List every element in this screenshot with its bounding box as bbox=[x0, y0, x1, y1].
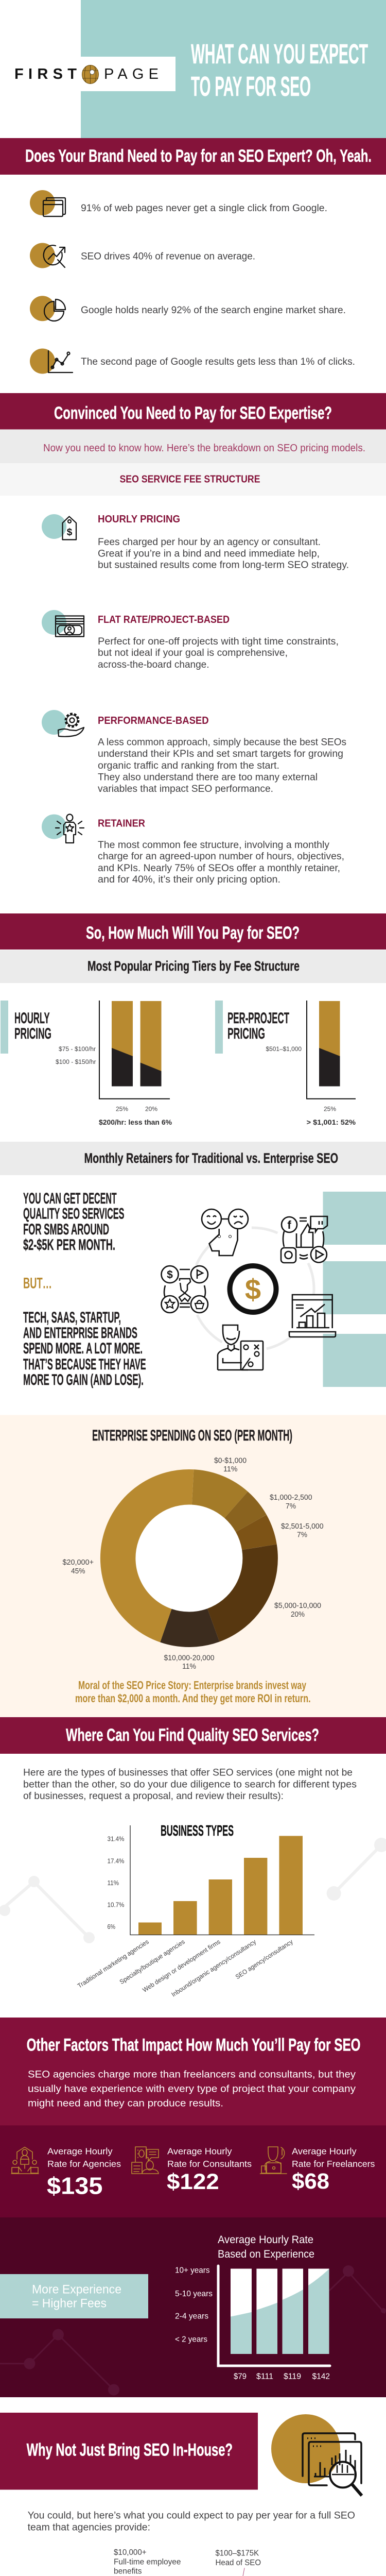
callout: more experience bbox=[0, 2274, 148, 2318]
chart: hourly pricing: $100 - $150/hr bbox=[56, 1059, 96, 1065]
text block: retainer copy: AND ENTERPRISE BRANDS bbox=[23, 1325, 137, 1342]
fee model: flat rate: FLAT RATE/PROJECT-BASED bbox=[98, 614, 230, 625]
icon: consultant bbox=[132, 2147, 159, 2174]
subheading band: fee structure: SEO SERVICE FEE STRUCTURE bbox=[119, 474, 260, 485]
title bbox=[191, 39, 368, 102]
icon: hand holding gear bbox=[42, 710, 84, 737]
body text: understand their KPIs and set smart targets for growing bbox=[98, 749, 343, 759]
icon: marketing funnel bbox=[162, 1266, 208, 1313]
chart: per-project pricing bbox=[215, 1001, 356, 1126]
chart: hourly rate by experience: $79 bbox=[234, 2372, 247, 2381]
donut labels: $10,000-20,000 bbox=[164, 1654, 214, 1662]
logo bbox=[14, 65, 159, 83]
callout: more experience: More Experience bbox=[32, 2283, 121, 2297]
stat: 40 percent bbox=[30, 243, 255, 268]
icon: star person bbox=[42, 814, 84, 843]
bar chart: business types: Traditional marketing agencies bbox=[76, 1938, 150, 1990]
icon: money bill bbox=[42, 610, 84, 637]
stat: 91 percent bbox=[30, 190, 327, 216]
donut labels bbox=[63, 1457, 323, 1671]
section heading: does your brand need SEO bbox=[0, 138, 386, 175]
bar chart: business types: Web design or development firms bbox=[142, 1938, 222, 1994]
text block: in-house intro: You could, but here’s what you could expect to pay per year for a full SEO bbox=[28, 2511, 355, 2521]
fee model: retainer bbox=[42, 814, 344, 885]
stat: second page: The second page of Google results gets less than 1% of clicks. bbox=[81, 357, 355, 367]
text block: retainer copy: THAT’S BECAUSE THEY HAVE bbox=[23, 1356, 146, 1373]
text block: usually have experience with every type of project that your company bbox=[28, 2083, 356, 2095]
label: head of SEO: Head of SEO bbox=[215, 2558, 261, 2567]
section heading: how much will you pay: So, How Much Will You Pay for SEO? bbox=[86, 923, 300, 943]
body text bbox=[98, 840, 344, 885]
teal side blocks bbox=[323, 1192, 386, 1387]
chart: hourly pricing: $75 - $100/hr bbox=[59, 1046, 96, 1053]
donut chart bbox=[89, 1458, 290, 1659]
stat: 92 percent bbox=[30, 296, 346, 321]
logo: FIRST bbox=[14, 66, 77, 82]
subheading band: monthly retainers bbox=[0, 1142, 386, 1175]
rate: consultants: Average Hourly bbox=[167, 2146, 232, 2157]
rate: agencies bbox=[11, 2146, 121, 2199]
fee model: retainer: RETAINER bbox=[98, 818, 146, 829]
stat: 92 percent: Google holds nearly 92% of the search engine market share. bbox=[81, 305, 346, 316]
text block bbox=[28, 2069, 356, 2109]
label: benefits: benefits bbox=[114, 2567, 142, 2576]
fee model: hourly pricing bbox=[42, 514, 349, 571]
bar chart: business types: 31.4% bbox=[107, 1835, 125, 1843]
rate: consultants bbox=[132, 2146, 252, 2194]
rate: freelancers: $68 bbox=[292, 2169, 329, 2194]
section heading: convinced bbox=[0, 393, 386, 430]
body text: Great if you’re in a bind and need immediate help, bbox=[98, 548, 320, 560]
donut labels: $20,000+ bbox=[63, 1558, 94, 1567]
donut chart: in-house cost bbox=[26, 2548, 358, 2576]
icon: faces and head bbox=[202, 1209, 248, 1256]
body text: A less common approach, simply because the best SEOs bbox=[98, 737, 346, 748]
rate: consultants: $122 bbox=[167, 2170, 219, 2194]
stat list bbox=[30, 190, 355, 374]
chart: hourly rate by experience: $142 bbox=[312, 2372, 330, 2381]
icon: price tag: $ bbox=[67, 527, 73, 538]
text block: business intro: Here are the types of businesses that offer SEO services (one might not be bbox=[23, 1768, 353, 1778]
text block: in-house intro bbox=[28, 2511, 355, 2533]
chart: hourly rate by experience bbox=[175, 2234, 330, 2381]
bar chart: business types: 11% bbox=[107, 1879, 119, 1887]
icon: freelancer bbox=[260, 2147, 287, 2174]
bar chart: business types: 17.4% bbox=[107, 1857, 125, 1865]
icon: marketing funnel: $ bbox=[167, 1269, 173, 1281]
body text: Perfect for one-off projects with tight time constraints, bbox=[98, 636, 339, 647]
chart: hourly pricing: 25% bbox=[116, 1106, 128, 1113]
chart: hourly rate by experience: 5-10 years bbox=[175, 2290, 213, 2298]
chart: per-project pricing: > $1,001: 52% bbox=[307, 1118, 356, 1126]
bar chart: business types: Specialty/boutique agencies bbox=[118, 1938, 186, 1986]
body text: variables that impact SEO performance. bbox=[98, 784, 273, 794]
body text bbox=[98, 537, 349, 571]
callout: moral bbox=[75, 1679, 311, 1705]
subheading band: pricing models: Now you need to know how. Here’s the breakdown on SEO pricing models. bbox=[43, 443, 365, 454]
donut labels: $5,000-10,000 bbox=[274, 1602, 321, 1610]
text block: in-house intro: team that agencies provide: bbox=[28, 2522, 150, 2533]
text block: retainer copy: YOU CAN GET DECENT bbox=[23, 1190, 117, 1207]
chart: hourly pricing: $200/hr: less than 6% bbox=[99, 1118, 172, 1126]
fee model: hourly pricing: HOURLY PRICING bbox=[98, 514, 180, 525]
donut labels: 11% bbox=[223, 1465, 238, 1473]
stat: 40 percent: SEO drives 40% of revenue on average. bbox=[81, 251, 255, 262]
label: head of SEO bbox=[215, 2549, 261, 2567]
section heading: in-house: Why Not Just Bring SEO In-House? bbox=[27, 2441, 233, 2460]
chart: hourly pricing: 20% bbox=[145, 1106, 157, 1113]
panel: enterprise spending bbox=[0, 1415, 386, 1717]
text block: retainer copy: MORE TO GAIN (AND LOSE). bbox=[23, 1371, 144, 1388]
bar chart: business types: Inbound/organic agency/consultancy bbox=[170, 1938, 258, 1998]
body text: and for 40%, it’s their only pricing option. bbox=[98, 874, 280, 885]
donut labels: $2,501-5,000 bbox=[281, 1522, 323, 1531]
label: benefits bbox=[114, 2548, 181, 2576]
text block: SEO agencies charge more than freelancers and consultants, but they bbox=[28, 2069, 356, 2080]
label: head of SEO: $100–$175K bbox=[215, 2549, 259, 2557]
body text: but not ideal if your goal is comprehensive, bbox=[98, 648, 288, 658]
chart: hourly pricing: HOURLY bbox=[14, 1010, 50, 1027]
callout: more experience: = Higher Fees bbox=[32, 2297, 107, 2311]
icon: analytics windows bbox=[271, 2414, 362, 2496]
diagram: what enterprise spend covers bbox=[162, 1203, 339, 1375]
donut labels: 11% bbox=[182, 1663, 196, 1671]
body text: The most common fee structure, involving a monthly bbox=[98, 840, 330, 851]
chart: hourly rate by experience: Average Hourly Rate bbox=[218, 2234, 313, 2246]
donut labels: 45% bbox=[71, 1567, 85, 1575]
stat: 91 percent: 91% of web pages never get a single click from Google. bbox=[81, 203, 327, 214]
body text: but sustained results come from long-term SEO strategy. bbox=[98, 560, 349, 571]
chart: hourly rate by experience: $111 bbox=[256, 2372, 273, 2381]
text block: retainer copy: SPEND MORE. A LOT MORE. bbox=[23, 1340, 143, 1357]
subheading band: fee structure bbox=[0, 463, 386, 496]
rate: agencies: Average Hourly bbox=[47, 2146, 113, 2157]
panel: hourly rates bbox=[0, 2125, 386, 2217]
text block: retainer copy: BUT… bbox=[23, 1275, 52, 1292]
subheading band: pricing tiers bbox=[0, 950, 386, 983]
text block: retainer copy: FOR SMBS AROUND bbox=[23, 1221, 109, 1238]
text block: business intro: better than the other, so do your due diligence to search for different types bbox=[23, 1779, 357, 1790]
chart: per-project pricing: PRICING bbox=[227, 1025, 265, 1042]
body text: Fees charged per hour by an agency or consultant. bbox=[98, 537, 321, 548]
text block: retainer copy: $2-$5K PER MONTH. bbox=[23, 1236, 115, 1253]
fee model: flat rate bbox=[42, 610, 339, 670]
icon: dollar centre bbox=[230, 1266, 276, 1312]
chart: per-project pricing: PER-PROJECT bbox=[227, 1010, 289, 1027]
text block: retainer copy: QUALITY SEO SERVICES bbox=[23, 1206, 125, 1223]
body text: organic traffic and ranking from the start. bbox=[98, 760, 279, 771]
chart: hourly rate by experience: $119 bbox=[284, 2372, 301, 2381]
icon: strategist bbox=[218, 1325, 263, 1370]
body text: and KPIs. Nearly 75% of SEOs offer a monthly retainer, bbox=[98, 863, 340, 874]
panel: other factors bbox=[0, 2018, 386, 2126]
section heading: where to find SEO bbox=[0, 1717, 386, 1754]
bar chart: business types: 6% bbox=[107, 1923, 115, 1930]
donut labels: 20% bbox=[291, 1611, 305, 1619]
body text: They also understand there are too many external bbox=[98, 772, 318, 783]
header panel bbox=[14, 0, 386, 138]
chart: per-project pricing: 25% bbox=[324, 1106, 336, 1113]
icon: social media bbox=[281, 1216, 327, 1263]
donut labels: $0-$1,000 bbox=[214, 1457, 247, 1465]
rate: agencies: Rate for Agencies bbox=[47, 2159, 121, 2169]
rate: freelancers bbox=[260, 2146, 375, 2194]
logo: PAGE bbox=[104, 66, 159, 82]
donut labels: $1,000-2,500 bbox=[270, 1494, 312, 1502]
icon: agency bbox=[11, 2147, 39, 2174]
text block: might need and they can produce results. bbox=[28, 2098, 223, 2109]
rate: consultants: Rate for Consultants bbox=[167, 2159, 252, 2169]
section heading: how much will you pay bbox=[0, 913, 386, 950]
text block: retainer copy bbox=[23, 1190, 146, 1388]
text block: business intro: of businesses, request a proposal, and review their results): bbox=[23, 1791, 284, 1802]
donut labels: 7% bbox=[297, 1531, 307, 1539]
bar chart: business types: BUSINESS TYPES bbox=[161, 1823, 234, 1839]
body text bbox=[98, 636, 339, 670]
chart: hourly rate by experience: 2-4 years bbox=[175, 2312, 208, 2321]
text block: business intro bbox=[23, 1768, 357, 1802]
fee model: performance-based: PERFORMANCE-BASED bbox=[98, 715, 209, 726]
bar chart: business types: SEO agency/consultancy bbox=[234, 1938, 294, 1980]
donut labels: 7% bbox=[286, 1502, 296, 1511]
icon: laptop analytics bbox=[289, 1295, 336, 1337]
chart: per-project pricing: $501–$1,000 bbox=[266, 1046, 302, 1053]
label: benefits: $10,000+ bbox=[114, 2548, 147, 2557]
chart: hourly pricing bbox=[1, 1001, 172, 1126]
subheading band: pricing tiers: Most Popular Pricing Tiers by Fee Structure bbox=[87, 958, 300, 974]
body text: across-the-board change. bbox=[98, 659, 209, 670]
bar chart: business types bbox=[76, 1823, 314, 1998]
section heading: in-house bbox=[0, 2413, 258, 2489]
fee model: performance-based bbox=[42, 710, 346, 794]
chart: hourly rate by experience: Based on Experience bbox=[218, 2248, 314, 2260]
body text: charge for an agreed-upon number of hours, objectives, bbox=[98, 851, 344, 862]
rate: freelancers: Average Hourly bbox=[292, 2146, 357, 2157]
icon: dollar centre: $ bbox=[245, 1273, 261, 1306]
chart: hourly pricing: PRICING bbox=[14, 1025, 51, 1042]
callout: moral: more than $2,000 a month. And they get more ROI in return. bbox=[75, 1692, 311, 1705]
rate: agencies: $135 bbox=[47, 2173, 103, 2199]
rate: freelancers: Rate for Freelancers bbox=[292, 2159, 375, 2169]
subheading band: pricing models bbox=[0, 430, 386, 463]
label: benefits: Full-time employee bbox=[114, 2557, 181, 2566]
chart: hourly rate by experience: < 2 years bbox=[175, 2335, 207, 2344]
icon: social media: f bbox=[287, 1218, 291, 1231]
panel: experience bbox=[0, 2217, 386, 2397]
bar chart: business types: 10.7% bbox=[107, 1901, 125, 1909]
chart: hourly rate by experience: 10+ years bbox=[175, 2266, 210, 2275]
body text bbox=[98, 737, 346, 794]
text block: retainer copy: TECH, SAAS, STARTUP, bbox=[23, 1309, 121, 1326]
stat: second page bbox=[30, 348, 355, 374]
icon: price tag bbox=[42, 514, 76, 540]
